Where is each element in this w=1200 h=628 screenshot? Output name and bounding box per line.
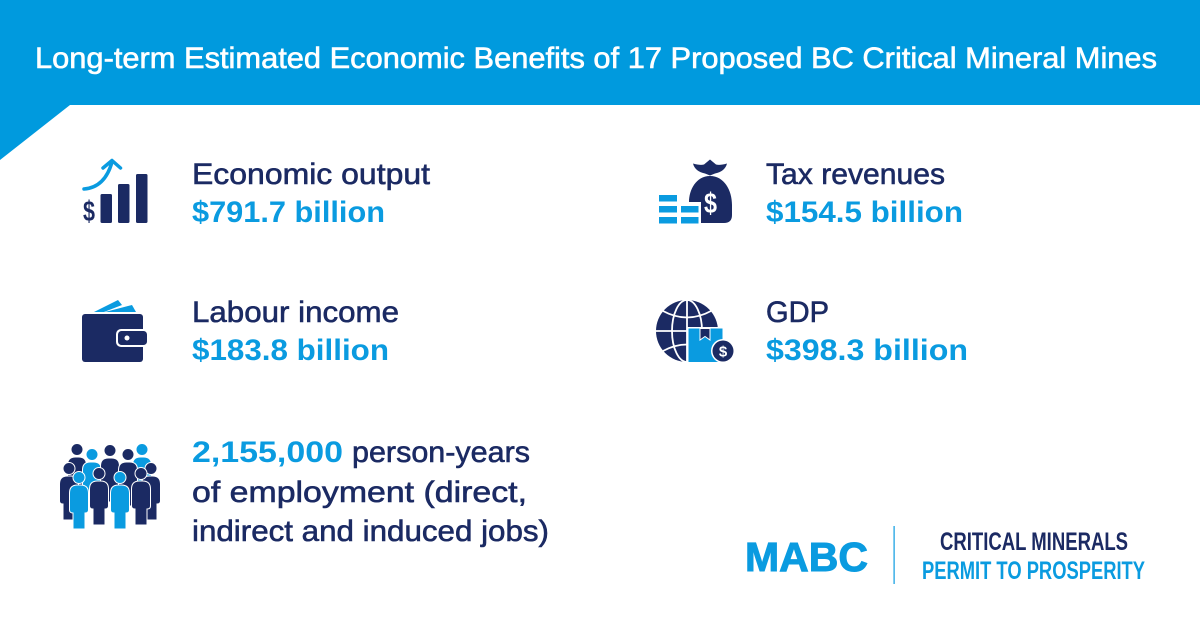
icon: wallet <box>82 300 148 362</box>
logo lockup <box>745 526 1145 585</box>
heading: economic output: Economic output <box>192 158 431 191</box>
icon: globe with box and coin: $ <box>719 344 728 360</box>
header banner <box>0 0 1200 160</box>
value: tax revenues: $154.5 billion <box>766 196 963 229</box>
text: person-years of employment: person-years <box>352 436 530 469</box>
icon: rising bar chart <box>83 160 148 228</box>
heading: gdp: GDP <box>766 296 829 329</box>
icon: globe with box and coin <box>656 300 735 363</box>
text: person-years of employment: indirect and induced jobs) <box>192 515 549 548</box>
heading: labour income: Labour income <box>192 296 399 329</box>
text: person-years of employment: of employment (direct, <box>192 476 527 509</box>
text: person-years of employment: 2,155,000 <box>192 436 343 469</box>
logo: MABC: MABC <box>745 534 868 580</box>
title: Long-term Estimated Economic Benefits of 17 Proposed BC Critical Mineral Mines <box>35 42 1157 75</box>
panel: employment <box>60 436 549 548</box>
icon: money bag and coins <box>659 160 732 224</box>
logo text: critical minerals: CRITICAL MINERALS <box>940 528 1128 556</box>
icon: rising bar chart: $ <box>83 196 95 228</box>
icon: money bag and coins: $ <box>704 188 717 220</box>
value: gdp: $398.3 billion <box>766 334 968 367</box>
icon: group of people <box>60 444 160 529</box>
value: labour income: $183.8 billion <box>192 334 389 367</box>
text: person-years of employment <box>192 436 549 548</box>
heading: tax revenues: Tax revenues <box>766 158 945 191</box>
value: economic output: $791.7 billion <box>192 196 385 229</box>
panel: gdp <box>656 296 968 367</box>
panel: tax revenues <box>659 158 963 229</box>
panel: economic output <box>83 158 431 229</box>
panel: labour income <box>82 296 399 367</box>
